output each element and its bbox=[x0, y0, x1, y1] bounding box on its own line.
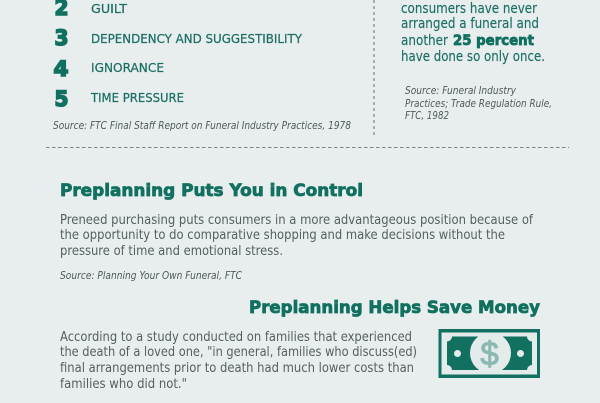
body text: the opportunity to do comparative shopping and make decisions without the bbox=[60, 227, 505, 243]
body text bbox=[60, 212, 534, 259]
list item 3 bbox=[54, 26, 302, 50]
source: funeral industry practices bbox=[405, 85, 552, 122]
statistic text: 25 percent bbox=[453, 33, 534, 49]
source: funeral industry practices: Source: Funeral Industry bbox=[405, 85, 517, 97]
body text: Preneed purchasing puts consumers in a more advantageous position because of bbox=[60, 212, 534, 228]
list item 2 bbox=[54, 0, 127, 20]
body text: the death of a loved one, "in general, families who discuss(ed) bbox=[60, 344, 417, 360]
body text: final arrangements prior to death had much lower costs than bbox=[60, 360, 414, 376]
list item 5: 5 bbox=[54, 87, 68, 111]
panel: consumer statistic bbox=[401, 1, 552, 122]
list item 3: DEPENDENCY AND SUGGESTIBILITY bbox=[91, 31, 302, 46]
body text: families who did not." bbox=[60, 376, 187, 392]
icon: dollar bill: $ bbox=[480, 335, 499, 372]
panel: list of vulnerabilities bbox=[53, 0, 351, 132]
statistic text: arranged a funeral and bbox=[401, 16, 539, 32]
source: FTC staff report: Source: FTC Final Staff Report on Funeral Industry Practices, 1978 bbox=[53, 120, 351, 132]
list item 5: TIME PRESSURE bbox=[90, 90, 184, 105]
source: funeral industry practices: FTC, 1982 bbox=[405, 110, 449, 122]
source: planning your own funeral: Source: Planning Your Own Funeral, FTC bbox=[60, 270, 243, 282]
panel: preplanning helps save money bbox=[60, 298, 540, 392]
statistic text: another bbox=[401, 33, 448, 49]
heading: Preplanning Puts You in Control bbox=[60, 181, 363, 201]
body text: pressure of time and emotional stress. bbox=[60, 243, 283, 259]
source: funeral industry practices: Practices; Trade Regulation Rule, bbox=[405, 98, 552, 110]
heading: Preplanning Helps Save Money bbox=[249, 298, 540, 318]
panel: preplanning puts you in control bbox=[60, 181, 534, 282]
list item 4: 4 bbox=[54, 57, 68, 81]
list item 2: GUILT bbox=[91, 1, 127, 16]
list item 3: 3 bbox=[54, 26, 68, 50]
body text bbox=[60, 329, 417, 392]
list item 5 bbox=[54, 87, 184, 111]
statistic text: have done so only once. bbox=[401, 49, 545, 65]
statistic text: consumers have never bbox=[401, 1, 537, 17]
icon: dollar bill bbox=[438, 329, 540, 378]
body text: According to a study conducted on families that experienced bbox=[60, 329, 412, 345]
statistic text bbox=[401, 1, 545, 65]
list item 4 bbox=[54, 57, 164, 81]
list item 4: IGNORANCE bbox=[91, 60, 164, 75]
